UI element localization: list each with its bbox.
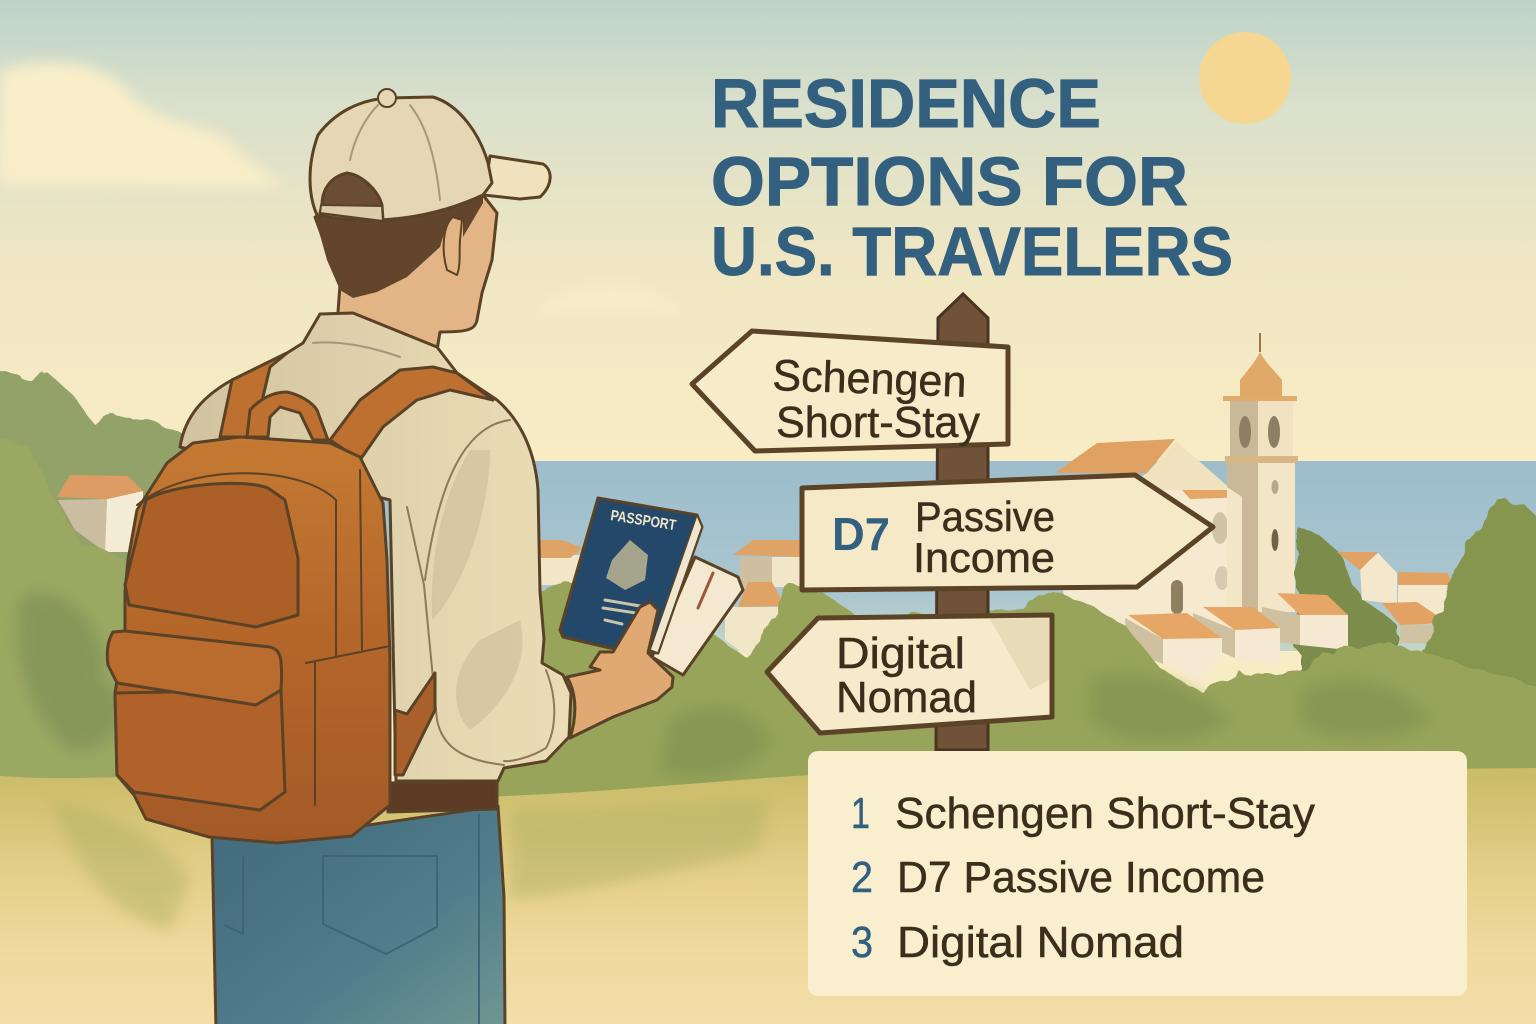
jeans: [212, 806, 505, 1024]
left hillside house: [57, 475, 143, 552]
sign: Digital Nomad: Digital: [836, 629, 965, 678]
list item 3: 3: [851, 918, 873, 967]
sleeve folds and shadows: [407, 420, 554, 765]
list item 2: D7 Passive Income: [897, 853, 1265, 902]
sun: [1199, 32, 1291, 124]
list item 1: 1: [851, 789, 870, 838]
backpack lower pocket: [115, 690, 285, 810]
face and neck: [315, 195, 497, 350]
hand: [567, 602, 673, 738]
collar line: [313, 342, 400, 357]
list item 2: 2: [851, 853, 873, 902]
sign: D7 Passive Income: D7: [832, 508, 890, 560]
title: U.S. TRAVELERS: [711, 213, 1233, 290]
sign: Schengen Short-Stay: Short-Stay: [776, 398, 980, 447]
sign: Schengen Short-Stay: Schengen: [772, 351, 967, 407]
trees behind houses: [1297, 527, 1397, 700]
backpack straps: [220, 353, 493, 460]
title: OPTIONS FOR: [711, 143, 1188, 220]
small houses by passport: [540, 540, 805, 656]
foreground bushes: [495, 585, 1536, 810]
sandy ground with dry grass: [0, 768, 1536, 1024]
hair: [315, 195, 483, 298]
sign: Schengen Short-Stay: [692, 331, 1008, 451]
sign: D7 Passive Income: Passive: [915, 493, 1055, 540]
signpost: [936, 294, 988, 750]
lower backpack strap: [395, 673, 435, 775]
right edge trees: [1422, 500, 1536, 760]
passport: PASSPORT: [609, 507, 677, 534]
belt: [388, 781, 497, 812]
clouds: [0, 62, 695, 315]
title: [711, 65, 1233, 290]
church: [1055, 439, 1250, 640]
ear: [444, 217, 462, 275]
left hillside front trees: [0, 438, 220, 790]
sea: [0, 461, 1536, 651]
backpack pocket flap: [107, 631, 282, 705]
bell tower: [1223, 333, 1298, 612]
sign: D7 Passive Income: [802, 475, 1213, 590]
notebook: [652, 557, 743, 675]
hiker: [107, 89, 743, 1024]
cap: [310, 89, 550, 221]
shirt torso and sleeve: [180, 313, 571, 781]
far right houses: [1337, 552, 1453, 643]
dry grass tufts: [50, 800, 770, 930]
sign: D7 Passive Income: Income: [913, 534, 1055, 581]
left hillside back trees: [0, 366, 260, 620]
darker shrub patches: [660, 674, 1430, 778]
shaded foliage patch: [17, 593, 121, 751]
passport: [560, 498, 702, 653]
sign: Digital Nomad: [767, 615, 1052, 733]
backpack upper pocket: [125, 483, 298, 627]
list panel: [808, 751, 1467, 996]
backpack body: [115, 437, 390, 843]
distant village: [1055, 333, 1453, 700]
backpack seams: [137, 470, 390, 805]
list item 1: Schengen Short-Stay: [895, 789, 1315, 838]
near houses: [1125, 593, 1348, 682]
sign: Digital Nomad: Nomad: [836, 673, 977, 722]
title: RESIDENCE: [711, 65, 1101, 142]
list item 3: Digital Nomad: [897, 918, 1184, 967]
